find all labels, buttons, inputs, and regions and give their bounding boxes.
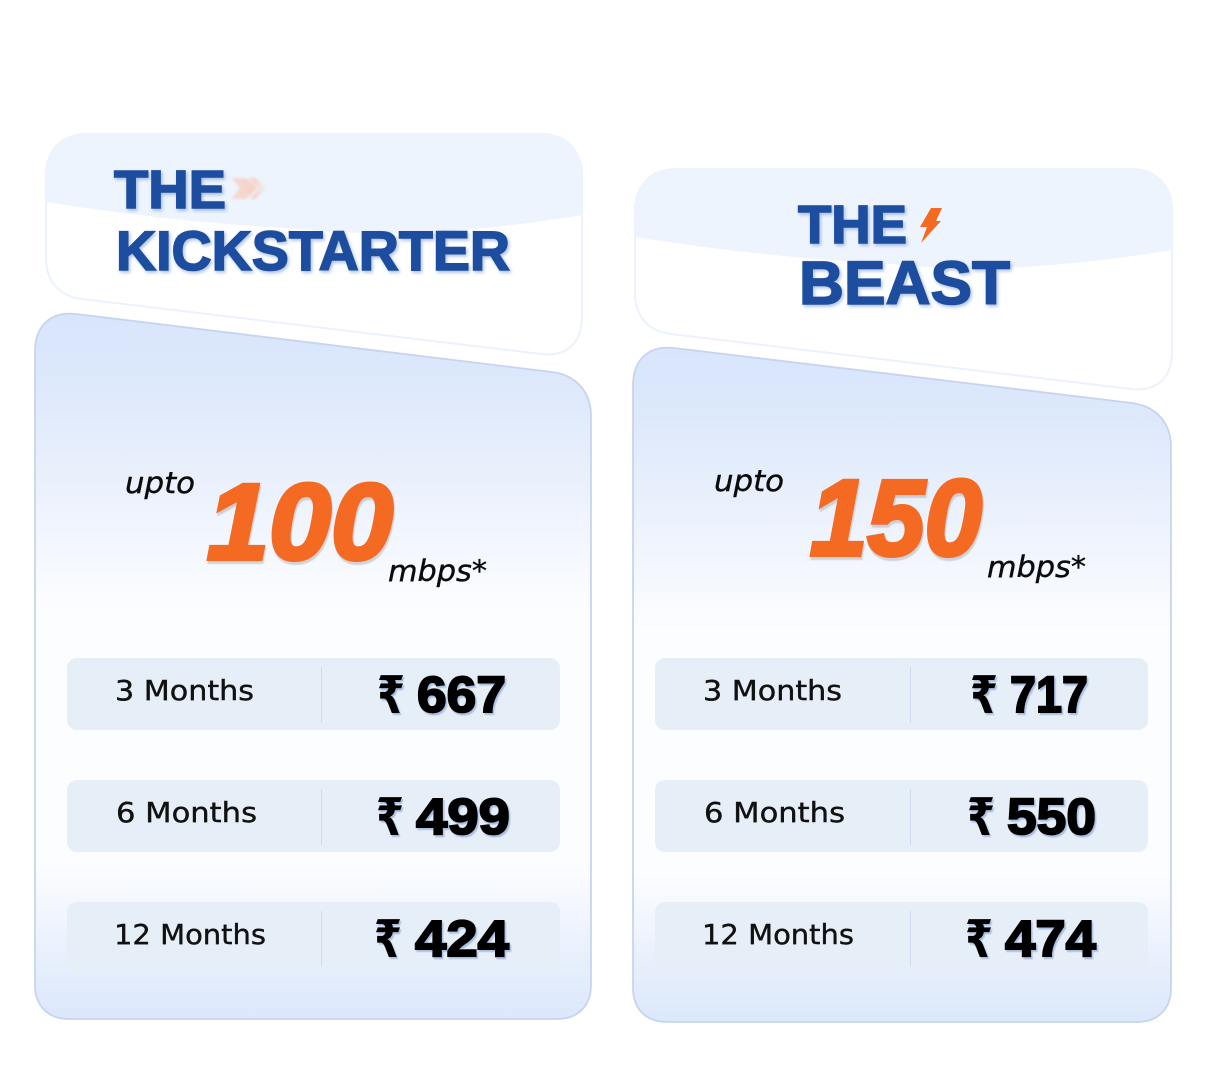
speed: upto 150 mbps bbox=[714, 457, 1086, 584]
price row: 6 months 499: 499 bbox=[416, 788, 510, 845]
price row: 6 months 550 bbox=[655, 780, 1148, 852]
plan card: The Kickstarter bbox=[35, 134, 591, 1019]
price row: 3 months 667: 3 Months bbox=[115, 674, 254, 707]
icon: lightning bolt bbox=[920, 208, 942, 243]
price row: 12 months 424: 424 bbox=[415, 910, 510, 967]
price row: 3 months 717: ₹ bbox=[970, 666, 998, 726]
price row: 3 months 667 bbox=[67, 658, 560, 730]
price row: 12 months 474 bbox=[655, 902, 1148, 974]
speed: upto 150 mbps: mbps* bbox=[987, 550, 1086, 584]
price row: 6 months 499: 6 Months bbox=[116, 796, 257, 829]
price row: 12 months 474: 474 bbox=[1005, 910, 1097, 967]
heading: The Kickstarter: THE bbox=[114, 160, 226, 220]
price row: 12 months 424: ₹ bbox=[374, 910, 402, 970]
speed: upto 100 mbps: 100 bbox=[207, 461, 393, 582]
header panel: The Kickstarter bbox=[46, 134, 582, 354]
pricing panel: Beast bbox=[633, 348, 1171, 1022]
price row: 12 months 424: 12 Months bbox=[114, 918, 266, 951]
price row: 12 months 474: 12 Months bbox=[702, 918, 854, 951]
speed: upto 100 mbps: mbps* bbox=[388, 554, 487, 588]
price row: 6 months 550: 550 bbox=[1007, 788, 1096, 845]
heading: The Beast: BEAST bbox=[799, 249, 1010, 317]
price row: 12 months 474: ₹ bbox=[965, 910, 993, 970]
icon: fading arrow bbox=[231, 178, 268, 199]
header panel: The Beast bbox=[635, 169, 1172, 389]
price row: 12 months 424 bbox=[67, 902, 560, 974]
heading: The Kickstarter: KICKSTARTER bbox=[116, 219, 510, 282]
price row: 6 months 499: ₹ bbox=[376, 788, 404, 848]
price row: 3 months 667: ₹ bbox=[377, 666, 405, 726]
heading: The Beast bbox=[798, 195, 1010, 317]
speed: upto 100 mbps bbox=[125, 461, 487, 588]
speed: upto 100 mbps: upto bbox=[125, 466, 195, 500]
speed: upto 150 mbps: upto bbox=[714, 464, 784, 498]
price row: 3 months 667: 667 bbox=[417, 666, 506, 723]
heading: The Kickstarter bbox=[114, 160, 510, 282]
plan card: The Beast bbox=[633, 169, 1172, 1022]
price row: 3 months 717: 717 bbox=[1010, 666, 1088, 723]
speed: upto 150 mbps: 150 bbox=[810, 457, 982, 578]
price row: 6 months 550: 6 Months bbox=[704, 796, 845, 829]
heading: The Beast: THE bbox=[798, 195, 907, 255]
price row: 3 months 717 bbox=[655, 658, 1148, 730]
pricing panel: Kickstarter bbox=[35, 314, 591, 1019]
price row: 6 months 499 bbox=[67, 780, 560, 852]
price row: 3 months 717: 3 Months bbox=[703, 674, 842, 707]
price row: 6 months 550: ₹ bbox=[967, 788, 995, 848]
